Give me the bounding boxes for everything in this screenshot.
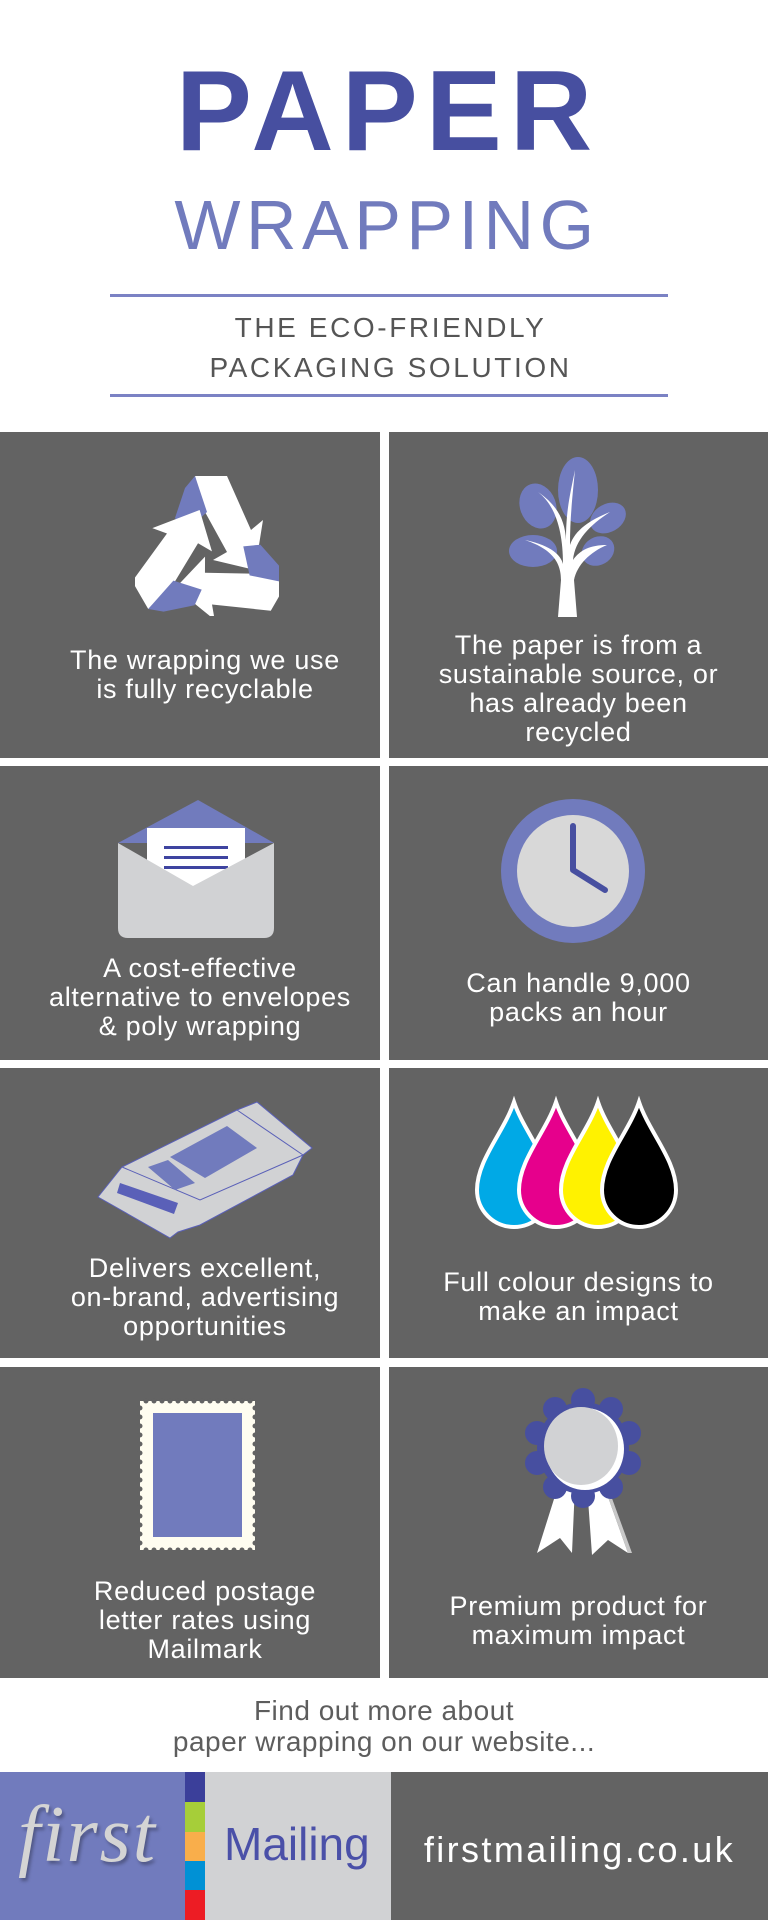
text: recyclable: The wrapping we use [70,645,340,675]
panel: speed [389,766,768,1060]
panel: recyclable [0,432,380,758]
panel: sustainable [389,432,768,758]
logo: colour stripe [185,1772,205,1920]
tagline text: THE ECO-FRIENDLY [235,312,546,343]
text: sustainable: recycled [525,717,632,747]
text: premium: maximum impact [472,1620,685,1650]
text: postage: Reduced postage [94,1576,316,1606]
text: full colour: make an impact [478,1296,679,1326]
subtitle heading: WRAPPING: WRAPPING [174,186,600,264]
icon: envelope [118,800,274,938]
tagline text: PACKAGING SOLUTION [209,352,572,383]
text: speed: Can handle 9,000 [466,968,691,998]
text: sustainable [439,630,718,747]
text: sustainable: has already been [469,688,688,718]
icon: clock [501,799,645,943]
text: speed [466,968,691,1027]
text: advertising: on-brand, advertising [71,1282,339,1312]
text: cost-effective: & poly wrapping [99,1011,301,1041]
icon: rosette [525,1388,641,1555]
footer bar: logo and website [0,1772,768,1920]
footer call to action [173,1695,595,1757]
panel: full colour [389,1068,768,1358]
panel: advertising [0,1068,380,1358]
icon: package [97,1102,313,1238]
text: advertising: opportunities [123,1311,287,1341]
text: postage: letter rates using [99,1605,311,1635]
tagline text [209,312,572,383]
icon: stamp [140,1401,255,1550]
text: premium: Premium product for [450,1591,707,1621]
footer call to action: paper wrapping on our website... [173,1726,595,1757]
tagline block [110,294,668,397]
text: recyclable: is fully recyclable [96,674,314,704]
text: postage [94,1576,316,1664]
text: cost-effective: alternative to envelopes [49,982,351,1012]
text: advertising: Delivers excellent, [89,1253,321,1283]
logo: Mailing: Mailing [224,1818,370,1870]
text: premium [450,1591,707,1650]
text: postage: Mailmark [147,1634,263,1664]
text: full colour [443,1267,714,1326]
panel: postage [0,1367,380,1678]
logo: first: first [18,1791,157,1879]
text: speed: packs an hour [489,997,668,1027]
icon: recycle [135,476,279,616]
icon: ink drops [475,1096,678,1229]
icon: tree [509,457,626,617]
text: sustainable: The paper is from a [455,630,702,660]
text: advertising [71,1253,339,1341]
text: cost-effective: A cost-effective [103,953,297,983]
footer call to action: Find out more about [254,1695,514,1726]
text: full colour: Full colour designs to [443,1267,714,1297]
panel: cost-effective [0,766,380,1060]
text: sustainable: sustainable source, or [439,659,718,689]
title: PAPER: PAPER [176,48,600,175]
text: recyclable [70,645,340,704]
panel: premium [389,1367,768,1678]
text: cost-effective [49,953,351,1041]
website url: firstmailing.co.uk [424,1829,735,1870]
